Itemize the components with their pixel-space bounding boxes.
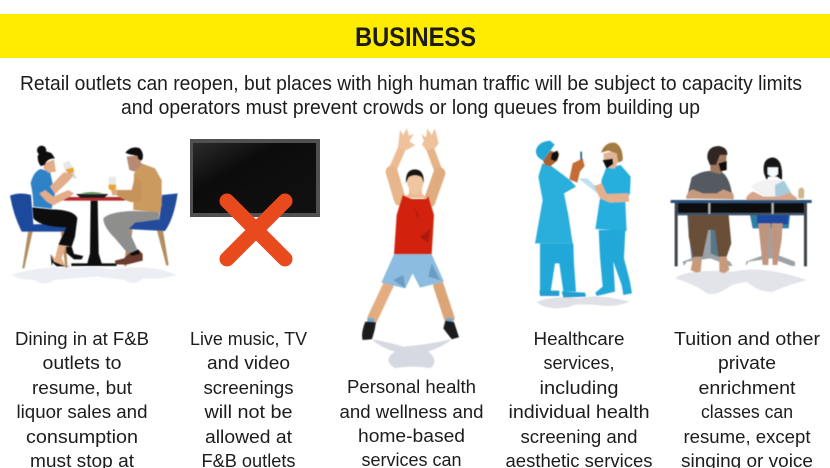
column text: healthcare bbox=[506, 329, 652, 468]
column text: tuition: Tuition and other bbox=[674, 329, 820, 349]
column text: healthcare: screening and bbox=[520, 427, 638, 447]
intro text bbox=[20, 73, 802, 119]
column text: dining: liquor sales and bbox=[16, 402, 148, 422]
column text: live music: and video bbox=[207, 353, 290, 373]
icon: television with red cross bbox=[190, 139, 320, 259]
column text: live music: allowed at bbox=[205, 427, 292, 447]
column text: live music bbox=[190, 329, 307, 468]
column text: dining: Dining in at F&B bbox=[15, 329, 149, 349]
column text: healthcare: including bbox=[540, 378, 618, 398]
column text: live music: will not be bbox=[203, 402, 292, 422]
icon: two students at a desk bbox=[671, 146, 812, 294]
column text: dining: resume, but bbox=[32, 378, 132, 398]
icon: man doing star jump bbox=[362, 128, 459, 368]
column text: tuition: classes can bbox=[701, 402, 793, 422]
column text: dining: outlets to bbox=[42, 353, 122, 373]
column text: live music: screenings bbox=[204, 378, 294, 398]
column text: tuition: enrichment bbox=[698, 378, 796, 398]
intro text: Retail outlets can reopen, but places with high human traffic will be subject to capacity limits bbox=[20, 73, 802, 95]
column text: personal health: and wellness and bbox=[340, 402, 484, 422]
icon: red cross bbox=[227, 201, 285, 259]
column text: dining: consumption bbox=[26, 427, 138, 447]
column text: tuition: resume, except bbox=[684, 427, 810, 447]
icon: healthcare workers in scrubs bbox=[535, 141, 632, 308]
column text: dining bbox=[15, 329, 149, 468]
column text: tuition: private bbox=[718, 353, 776, 373]
column text: healthcare: individual health bbox=[508, 402, 650, 422]
column text: personal health: home-based bbox=[358, 426, 465, 446]
column text: personal health bbox=[340, 377, 484, 468]
column text: live music: Live music, TV bbox=[190, 329, 307, 349]
column text: healthcare: services, bbox=[544, 353, 614, 373]
title banner bbox=[0, 14, 830, 58]
column text: tuition bbox=[674, 329, 820, 468]
intro text: and operators must prevent crowds or long queues from building up bbox=[121, 97, 700, 119]
column text: healthcare: Healthcare bbox=[534, 329, 624, 349]
title: BUSINESS: BUSINESS bbox=[355, 22, 476, 52]
icon: couple dining at table bbox=[10, 146, 178, 284]
column text: personal health: Personal health bbox=[347, 377, 476, 397]
